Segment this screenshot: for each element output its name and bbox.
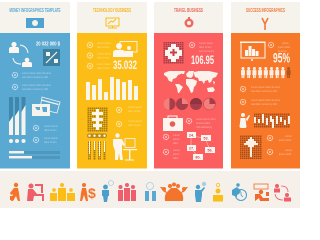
icon: man with dollar <box>80 183 96 201</box>
figure: technology: 35.032 <box>113 60 137 72</box>
text rows: dolor sit am <box>128 124 140 127</box>
chart: horizontal bars <box>9 151 60 159</box>
text block: Lorem ipsum dolor <box>196 118 216 121</box>
text row 1 <box>12 72 51 79</box>
text row: Lorem <box>173 149 180 152</box>
chart: slanted bars <box>9 97 26 135</box>
chart: pie row <box>164 98 216 110</box>
heading: travel: TRAVEL BUSINESS <box>174 8 203 14</box>
icon: pixel cross <box>163 42 184 64</box>
text rows <box>240 86 280 106</box>
text row 3: Lorem ipsum <box>44 125 58 128</box>
icon: man with globe <box>195 182 206 202</box>
icon: man with dollar: $ <box>88 185 96 201</box>
icon: pixel tree <box>87 107 108 132</box>
text row: ipsum <box>173 138 179 141</box>
icon: speech pair <box>145 182 156 201</box>
heading: technology: TECHNOLOGY BUSINESS <box>93 8 131 14</box>
text rows: dolor sit am <box>128 110 140 113</box>
icon: exchange people red <box>274 184 291 202</box>
text block <box>268 42 291 53</box>
icon: runner and clock <box>232 183 246 200</box>
panel: technology <box>77 2 147 168</box>
icon: monitor <box>106 18 119 28</box>
text rows <box>87 42 111 70</box>
icon: presentation board <box>240 42 266 61</box>
heading: money: MONEY INFOGRAPHICS TEMPLATE <box>10 8 61 14</box>
text row 2: Lorem ipsum dolor sit amet <box>22 84 51 87</box>
icon: pixel square <box>43 49 60 66</box>
icon: pixel arrow <box>240 135 262 159</box>
text row 4 <box>33 137 58 144</box>
text rows: dolor sit am <box>97 46 109 49</box>
text rows: ipsum dolor <box>279 153 292 156</box>
text rows: ipsum dolor <box>279 139 292 142</box>
text row 4: dolor sit am <box>44 141 56 144</box>
text rows: Lorem ipsum <box>97 63 111 66</box>
text row 3: dolor sit am <box>44 129 56 132</box>
text row: dolor <box>173 142 179 145</box>
icon: red team <box>118 183 136 201</box>
icon: man at computer <box>254 184 269 201</box>
chart: percent tags: 24. <box>189 134 194 138</box>
text block: dolor sit am <box>199 46 211 49</box>
text block <box>186 118 216 129</box>
text row 3 <box>33 125 58 132</box>
text row 2 <box>12 84 51 91</box>
icon: slingshot <box>262 18 268 30</box>
text row 1: Lorem ipsum dolor sit amet <box>22 72 51 75</box>
text row: dolor <box>173 157 179 160</box>
chart: bars <box>86 77 138 100</box>
chart: percent tags: 53. <box>203 136 209 140</box>
chart: percent tags: 80. <box>195 156 201 160</box>
chart: world map <box>164 71 218 93</box>
icon: gold group <box>50 183 75 201</box>
text row <box>163 134 180 145</box>
panel: success <box>231 2 300 168</box>
text rows <box>267 135 292 156</box>
text rows: Lorem ipsum <box>128 120 142 123</box>
text rows: Lorem <box>285 135 292 138</box>
icon: map and card <box>32 97 60 116</box>
text rows: Lorem ipsum dolor sit amet <box>251 86 280 89</box>
text rows: sed diam nonummy nibh <box>251 90 278 93</box>
text block: Lorem ipsum <box>199 42 213 45</box>
icon: thinking man <box>102 180 114 202</box>
text rows: Lorem <box>285 149 292 152</box>
icon: gold person <box>213 183 223 202</box>
text row 4: Lorem ipsum <box>44 137 58 140</box>
icon: man at board <box>113 133 137 160</box>
chart: pixel equalizer <box>254 113 290 128</box>
band: bottom icons <box>0 171 300 208</box>
text block: Lorem <box>282 42 289 45</box>
text row: ipsum <box>173 153 179 156</box>
text rows: dolor sit am <box>97 56 109 60</box>
text rows: Lorem ipsum <box>97 52 111 56</box>
chart: people row <box>241 67 291 78</box>
chart: percent tags: 27. <box>189 146 194 150</box>
figure: money total: 20 032 000 $ <box>36 42 60 48</box>
text block: sed nonummy <box>199 50 215 53</box>
text row 1: sed diam nonummy nibh <box>22 76 49 79</box>
text row 2: sed diam nonummy nibh <box>22 88 49 91</box>
figure: travel: 106.95 <box>191 53 214 67</box>
icon: stopwatch <box>184 17 194 28</box>
text row <box>163 149 180 160</box>
icon: cheering crowd <box>160 182 188 201</box>
text row: Lorem <box>173 134 180 137</box>
icon: banknote <box>26 18 44 28</box>
chart: percent tags: 56. <box>207 148 213 152</box>
panel: travel <box>154 2 223 168</box>
text block: sit amet diam <box>196 122 210 125</box>
icon: briefcase <box>163 116 183 131</box>
chart: sliders <box>87 134 107 160</box>
dots <box>9 139 26 143</box>
icon: exchange people <box>9 42 32 67</box>
text block: ipsum dolor <box>278 46 291 49</box>
icon: walking man <box>10 183 20 201</box>
text rows: Lorem ipsum <box>128 106 142 109</box>
text rows: sed diam nonummy nibh <box>251 103 278 106</box>
chart: percent tags <box>187 132 215 160</box>
text rows: dolor sit am <box>97 67 109 70</box>
panel: money <box>0 2 70 168</box>
icon: speaker <box>240 113 250 128</box>
icon: presenter <box>113 42 137 57</box>
text block: nibh adipiscing <box>196 126 212 129</box>
text rows: Lorem ipsum dolor sit amet <box>251 99 280 102</box>
text rows: Lorem ipsum <box>97 42 111 45</box>
text rows <box>116 106 142 127</box>
text block: sit amet <box>278 50 287 53</box>
text block <box>189 42 215 53</box>
icon: man at desk <box>27 184 44 201</box>
